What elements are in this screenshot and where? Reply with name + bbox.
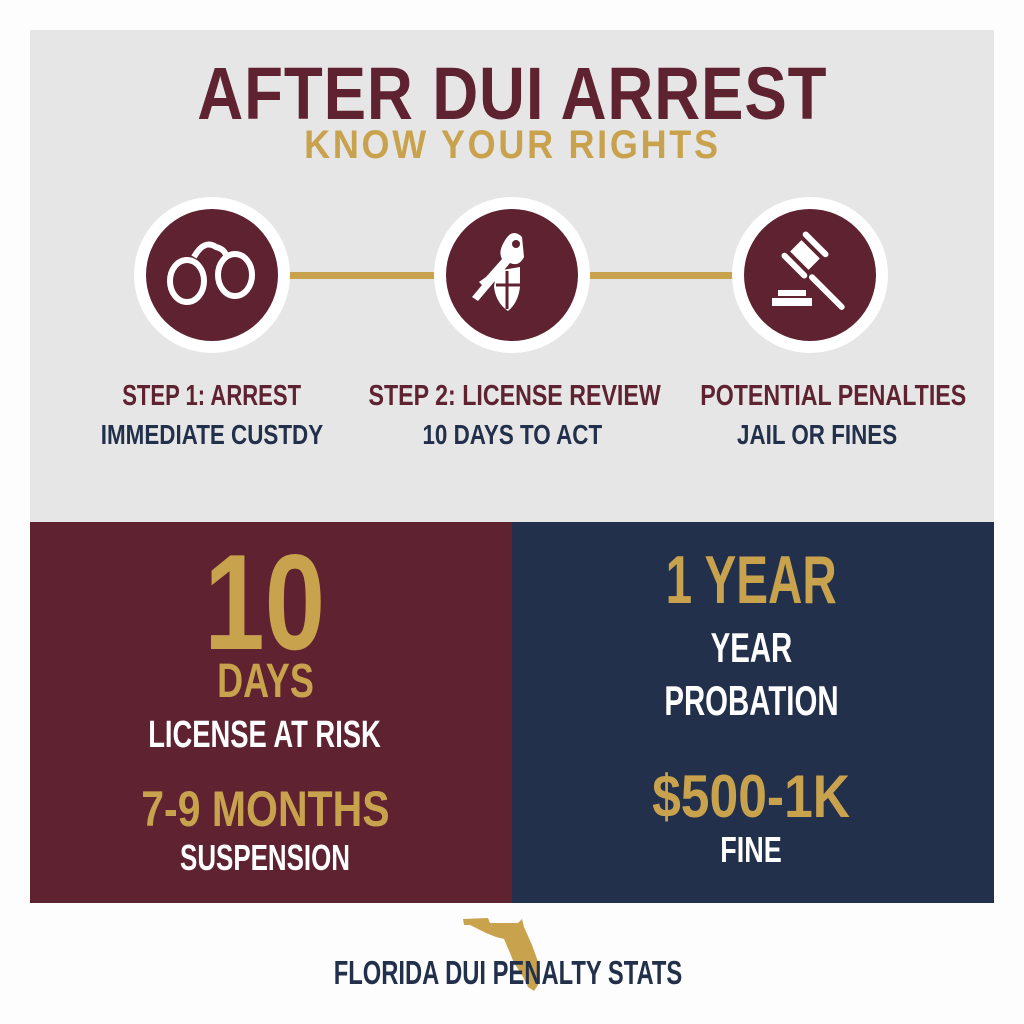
days: DAYS — [217, 655, 313, 708]
text: penalties: POTENTIAL PENALTIES — [700, 380, 966, 412]
fine: FINE — [720, 829, 782, 870]
big number 10: 10 — [204, 526, 326, 678]
text: penalties: JAIL OR FINES — [737, 419, 897, 450]
panel: probation and fines — [512, 522, 994, 903]
text: step 1 — [101, 380, 323, 450]
subtitle: KNOW YOUR RIGHTS — [304, 123, 720, 167]
text: step 2: STEP 2: LICENSE REVIEW — [369, 380, 661, 412]
license at risk: LICENSE AT RISK — [149, 714, 381, 756]
text: step 1: STEP 1: ARREST — [123, 380, 301, 412]
text: step 2: 10 DAYS TO ACT — [422, 419, 602, 450]
icon: gavel penalties — [732, 197, 888, 353]
year probation: PROBATION — [664, 676, 838, 724]
icon: handcuffs step 1 — [134, 197, 290, 353]
panel: top header — [30, 30, 994, 522]
text: step 2 — [369, 380, 661, 450]
year probation: YEAR — [710, 624, 792, 671]
icon: florida map — [463, 918, 540, 991]
7-9 months: 7-9 MONTHS — [141, 781, 389, 837]
panel: license stats — [30, 522, 512, 903]
suspension: SUSPENSION — [180, 837, 350, 878]
icon: key and shield step 2 — [434, 197, 590, 353]
text: penalties — [700, 380, 966, 450]
footer text: FLORIDA DUI PENALTY STATS — [334, 954, 682, 991]
connector lines — [285, 272, 745, 279]
title: AFTER DUI ARREST — [197, 52, 827, 135]
year probation — [664, 624, 838, 724]
1 year: 1 YEAR — [665, 542, 837, 618]
text: step 1: IMMEDIATE CUSTDY — [101, 419, 323, 450]
fine amount: $500-1K — [652, 763, 850, 830]
